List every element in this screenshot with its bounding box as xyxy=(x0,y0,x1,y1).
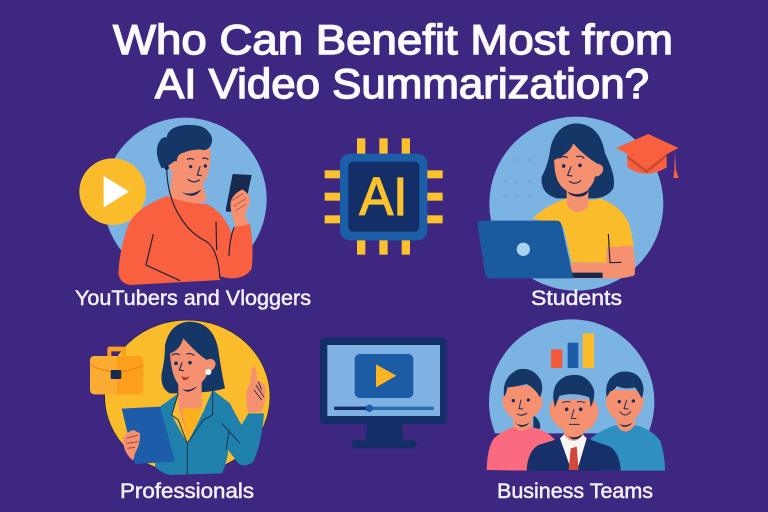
label: Professionals xyxy=(120,480,254,503)
icon: laptop xyxy=(478,221,603,278)
label: Students xyxy=(531,287,622,310)
hair xyxy=(542,123,614,198)
center person xyxy=(527,375,621,471)
icon: AI chip xyxy=(325,138,443,255)
neck and face xyxy=(170,173,207,205)
blazer xyxy=(155,390,264,475)
label: Business Teams xyxy=(497,480,653,503)
icon: briefcase xyxy=(90,347,143,394)
hair xyxy=(161,322,225,393)
illustration: vlogger with phone xyxy=(79,118,267,285)
title: AI Video Summarization? xyxy=(155,60,649,107)
icon: play button xyxy=(79,158,146,225)
face details xyxy=(187,158,208,182)
icon: graduation cap xyxy=(616,134,679,178)
icon: AI chip: AI xyxy=(359,168,407,227)
left person xyxy=(487,369,555,471)
title: Who Can Benefit Most from xyxy=(113,16,673,63)
icon: video monitor xyxy=(320,337,447,448)
shirt xyxy=(533,198,634,263)
panel: Business Teams xyxy=(487,319,665,503)
title xyxy=(113,16,673,107)
panel: Students xyxy=(478,117,679,310)
hand with finger xyxy=(246,366,266,413)
sweater xyxy=(118,196,253,285)
illustration: student with laptop xyxy=(478,117,679,291)
right person xyxy=(591,372,665,471)
label: YouTubers and Vloggers xyxy=(75,287,311,310)
illustration: professional woman xyxy=(90,320,270,475)
earphone cable xyxy=(146,168,234,281)
illustration: business team xyxy=(487,319,665,471)
hair xyxy=(157,125,212,168)
blouse xyxy=(182,408,202,442)
tablet xyxy=(122,407,175,464)
bar chart xyxy=(551,333,594,368)
left hand xyxy=(123,430,140,461)
panel: Professionals xyxy=(90,320,270,503)
hand xyxy=(230,189,250,226)
phone xyxy=(226,174,252,212)
arm xyxy=(570,245,635,279)
neck and face xyxy=(567,185,588,212)
panel: YouTubers and Vloggers xyxy=(75,118,311,310)
neck and face xyxy=(178,380,202,440)
